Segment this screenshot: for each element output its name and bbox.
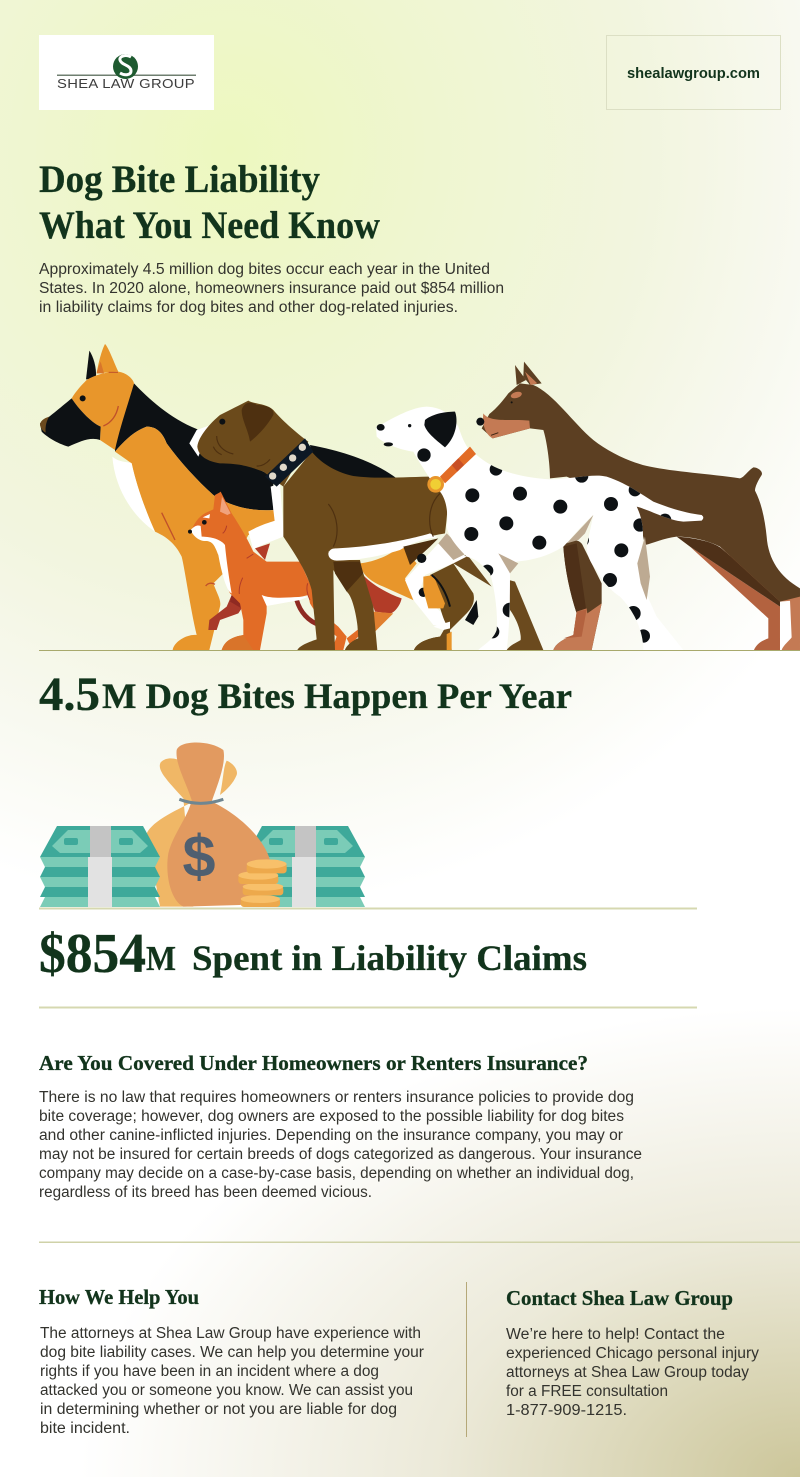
title: Dog Bite Liability [39,158,320,201]
section: insurance coverage [39,1051,642,1201]
intro text: Approximately 4.5 million dog bites occur each year in the United [39,261,490,278]
stat: liability claims: M [146,939,176,978]
section: how we help you: bite incident. [40,1420,130,1437]
section: how we help you: in determining whether or not you are liable for dog [40,1401,397,1418]
section: insurance coverage: Are You Covered Under Homeowners or Renters Insurance? [39,1051,588,1075]
ground line [39,650,800,651]
section: contact: attorneys at Shea Law Group today [506,1364,749,1381]
section: contact [506,1286,759,1419]
divider [39,908,697,910]
dog: dalmatian [376,407,703,650]
dog: orange chihuahua [188,492,347,650]
section: how we help you: rights if you have been in an incident where a dog [40,1363,379,1380]
section: insurance coverage: bite coverage; however, dog owners are exposed to the possible liability for dog bites [39,1108,624,1125]
section: how we help you [39,1285,424,1437]
icon: money bag [147,742,270,907]
intro text: in liability claims for dog bites and other dog-related injuries. [39,299,458,316]
illustration: five dogs [39,344,800,651]
section: contact: 1-877-909-1215. [506,1402,627,1419]
section: insurance coverage: may not be insured for certain breeds of dogs categorized as dangerous. Your insurance [39,1146,642,1163]
section: contact: for a FREE consultation [506,1383,668,1400]
title: What You Need Know [39,204,380,247]
stat: liability claims: Spent in Liability Claims [192,938,587,978]
website box [606,36,780,110]
intro text: States. In 2020 alone, homeowners insurance paid out $854 million [39,280,504,297]
icon: coin stack [238,859,287,907]
section: contact: We’re here to help! Contact the [506,1326,725,1343]
dog: doberman [453,362,800,650]
section: contact: experienced Chicago personal injury [506,1345,759,1362]
column divider [466,1282,467,1437]
section: how we help you: The attorneys at Shea Law Group have experience with [40,1325,421,1342]
intro text [39,261,504,316]
title [39,158,380,247]
section: insurance coverage: regardless of its breed has been deemed vicious. [39,1184,372,1201]
section: insurance coverage: and other canine-inflicted injuries. Depending on the insurance company, you may or [39,1127,623,1144]
website box: shealawgroup.com [627,65,760,82]
section: insurance coverage: There is no law that requires homeowners or renters insurance policies to provide dog [39,1089,634,1106]
icon: cash stack left [40,826,160,907]
section: insurance coverage: company may decide on a case-by-case basis, depending on whether an individual dog, [39,1165,634,1182]
logo: Shea Law Group [39,35,214,110]
stat: liability claims: $854 [39,923,146,985]
stat: liability claims [39,923,587,985]
icon: money bag: $ [182,823,215,890]
section: how we help you: dog bite liability cases. We can help you determine your [40,1344,424,1361]
illustration: money bag, cash, coins [40,742,365,907]
section: contact: Contact Shea Law Group [506,1286,733,1310]
dog: brown boxer [189,401,447,650]
stat: dog bites per year [39,668,572,721]
section: how we help you: How We Help You [39,1285,199,1309]
logo: Shea Law Group: SHEA LAW GROUP [57,76,195,91]
stat: dog bites per year: M Dog Bites Happen Per Year [102,676,572,716]
icon: cash stack right [245,826,365,907]
stat: dog bites per year: 4.5 [39,668,100,721]
divider [39,1006,697,1008]
section: how we help you: attacked you or someone you know. We can assist you [40,1382,413,1399]
divider [39,1242,800,1243]
dog: german shepherd [40,344,417,650]
